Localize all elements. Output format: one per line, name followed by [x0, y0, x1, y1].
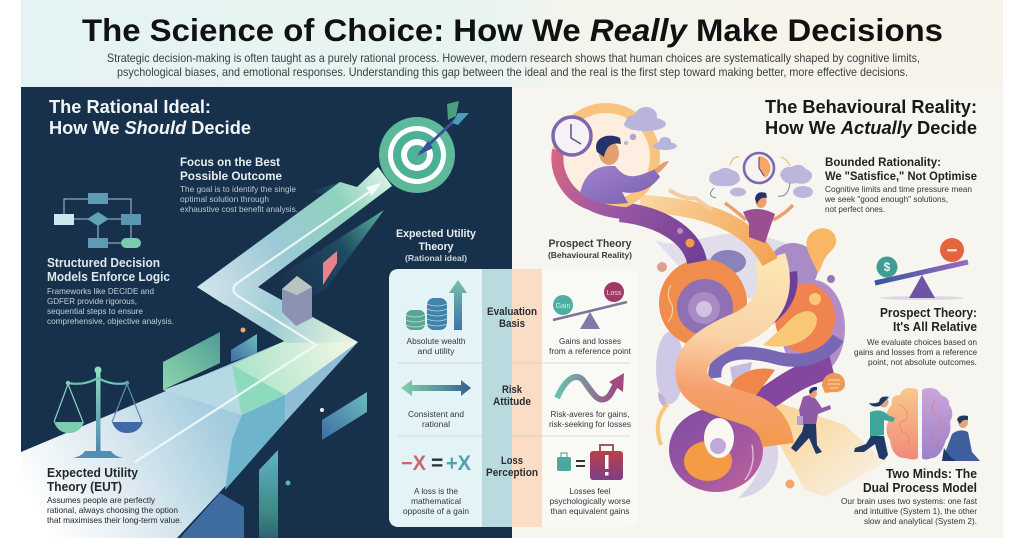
table right column text: psychologically worse [550, 496, 631, 506]
main cream ribbon [691, 258, 778, 445]
table right column text: from a reference point [549, 346, 632, 356]
upper left swirl [659, 259, 747, 347]
text: structured decision models [47, 256, 174, 326]
text: prospect theory: Prospect Theory: [880, 306, 977, 320]
upper beam [197, 167, 392, 305]
heading: table right column: (Behavioural Reality) [548, 250, 632, 260]
text: bounded rationality: not perfect ones. [825, 204, 885, 214]
icon: balance scale [54, 366, 143, 458]
heading: behavioural reality: How We Actually Decide [765, 117, 977, 138]
table row labels: Perception [486, 467, 538, 479]
heading: rational ideal [49, 96, 251, 138]
intro text: psychological biases, and emotional responses. Understanding this gap between the ideal and the real is the first step toward making better, more effective decisions. [117, 65, 908, 79]
text: dual process model: Two Minds: The [886, 467, 977, 481]
text: structured decision models: sequential steps to ensure [47, 306, 143, 316]
heading: behavioural reality: The Behavioural Reality: [765, 96, 977, 117]
text: structured decision models: Models Enforce Logic [47, 270, 170, 284]
illustration: brain with two figures [854, 388, 980, 461]
table right column text: Losses feel [570, 486, 611, 496]
table left column text: mathematical [411, 496, 461, 506]
lower beam [21, 340, 358, 538]
heading: table left column: Theory [418, 241, 454, 253]
text: focus on the best outcome: Possible Outcome [180, 169, 282, 183]
text: focus on the best outcome [180, 155, 298, 214]
sitting figure [942, 416, 980, 461]
table left column text: A loss is the [414, 486, 458, 496]
heading: table left column [396, 228, 477, 263]
text: bounded rationality: Bounded Rationality: [825, 155, 941, 169]
text: expected utility theory: Assumes people are perfectly [47, 495, 156, 505]
shadow wall [265, 210, 384, 306]
illustration: thinking person in ring [553, 107, 677, 213]
walking path [770, 400, 885, 497]
icon: minus X equals plus X: +X [446, 452, 471, 475]
icon: minus X equals plus X: = [431, 452, 443, 475]
right swirl [763, 280, 845, 376]
table row labels: Risk [502, 384, 523, 396]
text: expected utility theory: Expected Utility [47, 466, 138, 480]
intro text [107, 51, 920, 79]
dark band [722, 272, 791, 345]
table left column text: opposite of a gain [403, 506, 469, 516]
icon: minus X equals plus X: −X [401, 452, 426, 475]
block faces [163, 365, 285, 490]
icon: gain and loss seesaw: Loss [607, 290, 622, 297]
table right column text: risk-seeking for losses [549, 419, 631, 429]
table left column text: Consistent and [408, 409, 464, 419]
heading: table right column: Prospect Theory [548, 238, 632, 250]
icon: small bag versus large briefcase [557, 445, 623, 480]
icon: minus X equals plus X [401, 452, 471, 475]
heading: rational ideal: How We Should Decide [49, 117, 251, 138]
table right column text: Gains and losses [559, 336, 621, 346]
illustration: walking person with speech bubble [791, 373, 845, 454]
blue band [715, 338, 838, 378]
small accents [657, 262, 667, 272]
text: structured decision models: comprehensive, objective analysis. [47, 316, 174, 326]
lower arm [197, 287, 358, 343]
text: focus on the best outcome: Focus on the Best [180, 155, 280, 169]
lilac inset [730, 362, 752, 385]
table row labels: Attitude [493, 396, 531, 408]
ring [557, 108, 655, 206]
text: prospect theory: We evaluate choices based on [867, 337, 977, 347]
icon: risk wave arrow [557, 373, 624, 400]
text: prospect theory [854, 306, 977, 367]
table left column text: Absolute wealth [406, 336, 466, 346]
person [580, 136, 669, 204]
text: dual process model: Our brain uses two systems: one fast [841, 496, 978, 506]
heading: table right column [548, 238, 632, 260]
beam tip [232, 340, 358, 395]
text: expected utility theory [47, 466, 182, 525]
table row labels: Basis [499, 318, 525, 330]
panel: comparison table [389, 269, 638, 527]
text: prospect theory: It's All Relative [893, 320, 977, 334]
text: bounded rationality [824, 155, 977, 214]
table row labels: Loss [501, 455, 523, 467]
text: structured decision models: Frameworks like DECIDE and [47, 286, 154, 296]
heading: behavioural reality [765, 96, 977, 138]
table row labels: Evaluation [487, 306, 537, 318]
text: dual process model: and intuitive (System 1), the other [854, 506, 977, 516]
orange piece [728, 368, 775, 401]
illustration: overwhelmed person with clock and clouds [709, 153, 813, 243]
table right column text: than equivalent gains [550, 506, 630, 516]
floating panels [163, 251, 367, 538]
text: expected utility theory: Theory (EUT) [47, 480, 122, 494]
title: The Science of Choice: How We Really Make Decisions [82, 12, 943, 48]
icon: flowchart [54, 193, 141, 248]
table row labels [486, 306, 538, 479]
icon: double arrow [401, 380, 471, 396]
icon: money versus loss seesaw: $ [884, 260, 891, 274]
text: focus on the best outcome: The goal is to identify the single [180, 185, 296, 194]
heading: table left column: Expected Utility [396, 228, 477, 240]
icon: gain and loss seesaw: Gain [556, 303, 570, 310]
text: bounded rationality: We "Satisfice," Not Optimise [825, 169, 977, 183]
clock [553, 117, 591, 155]
icon: gain and loss seesaw [553, 282, 627, 329]
text: structured decision models: GDFER provide rigorous, [47, 296, 137, 306]
intro text: Strategic decision-making is often taught as a purely rational process. However, modern research shows that human choices are systematically shaped by cognitive limits, [107, 51, 920, 65]
icon: coins and up arrow [406, 280, 467, 330]
text: bounded rationality: Cognitive limits and time pressure mean [825, 184, 972, 194]
heading: rational ideal: The Rational Ideal: [49, 96, 211, 117]
table right column text: Risk-averes for gains, [550, 409, 630, 419]
right illustration: decision ribbon swirl [620, 190, 885, 498]
thought cloud [624, 107, 677, 150]
icon: target with arrow [379, 101, 469, 193]
lower loop [669, 408, 763, 492]
text: focus on the best outcome: optimal solution through [180, 195, 269, 204]
table right column text [549, 336, 632, 516]
white route arrow [135, 183, 381, 462]
left panel illustration: path to target [21, 167, 392, 538]
text: dual process model: Dual Process Model [863, 481, 977, 495]
ribbon from thinking figure [640, 203, 770, 262]
heading: table left column: (Rational ideal) [405, 253, 467, 263]
table left column text: and utility [418, 346, 455, 356]
text: structured decision models: Structured Decision [47, 256, 160, 270]
icon: money versus loss seesaw [875, 238, 968, 300]
text: bounded rationality: we seek "good enough" solutions, [824, 194, 948, 204]
soft lilac shapes [655, 234, 798, 498]
text: focus on the best outcome: exhaustive cost benefit analysis. [180, 205, 298, 214]
purple sphere behind [768, 243, 818, 293]
dark shadow by arrowhead [310, 182, 357, 196]
text: dual process model [841, 467, 978, 526]
running figure [854, 396, 895, 460]
purple band [757, 366, 832, 402]
table left column text: rational [422, 419, 450, 429]
text: prospect theory: point, not absolute outcomes. [868, 357, 977, 367]
text: prospect theory: gains and losses from a reference [854, 347, 977, 357]
table left column text [403, 336, 469, 516]
text: dual process model: slow and analytical (System 2). [864, 516, 977, 526]
text: expected utility theory: that maximises their long-term value. [47, 515, 182, 525]
text: expected utility theory: rational, always choosing the option [47, 505, 178, 515]
